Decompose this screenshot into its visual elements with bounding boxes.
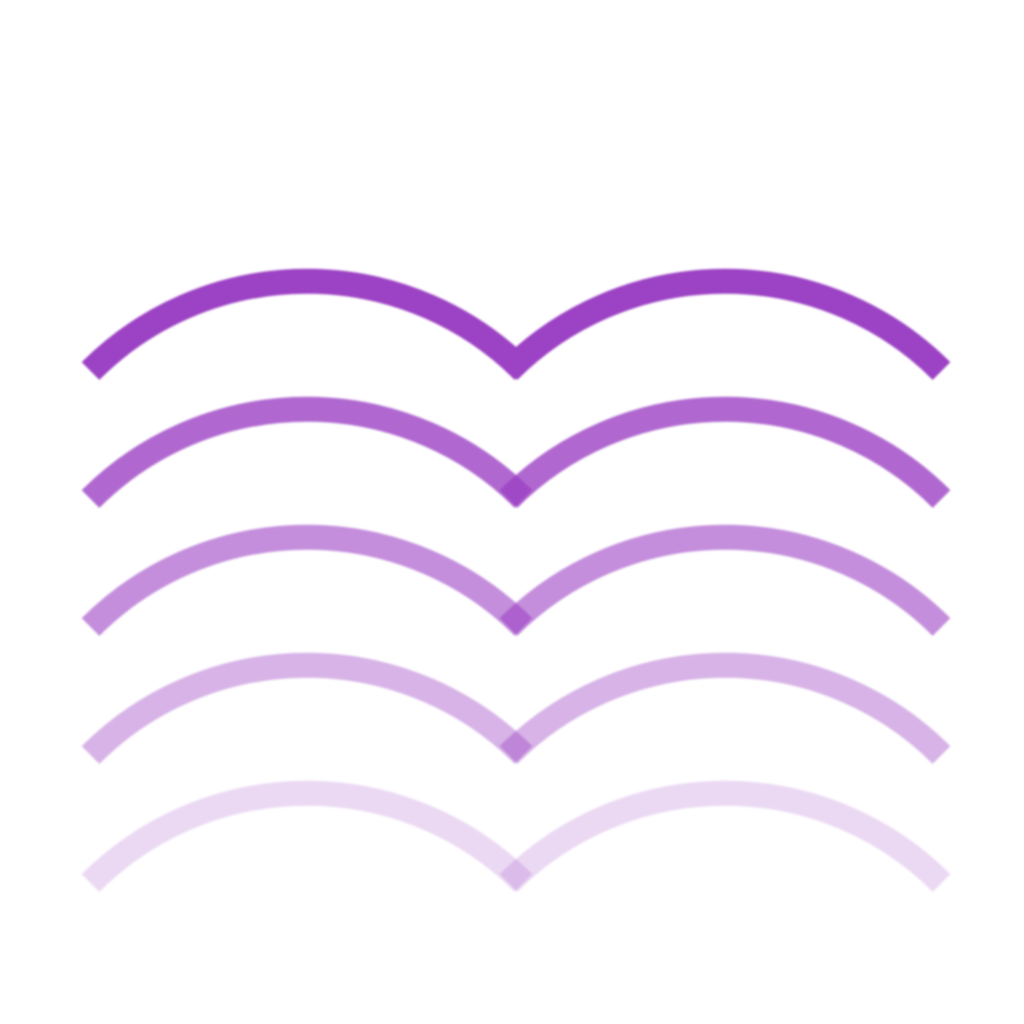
arc row 5: 20% opacity	[90, 793, 942, 883]
arc row 3: 60% opacity	[90, 537, 942, 627]
arc row 4: 40% opacity	[90, 665, 942, 755]
arc row 1: full opacity	[90, 281, 942, 371]
arc row 2: 80% opacity	[90, 409, 942, 499]
